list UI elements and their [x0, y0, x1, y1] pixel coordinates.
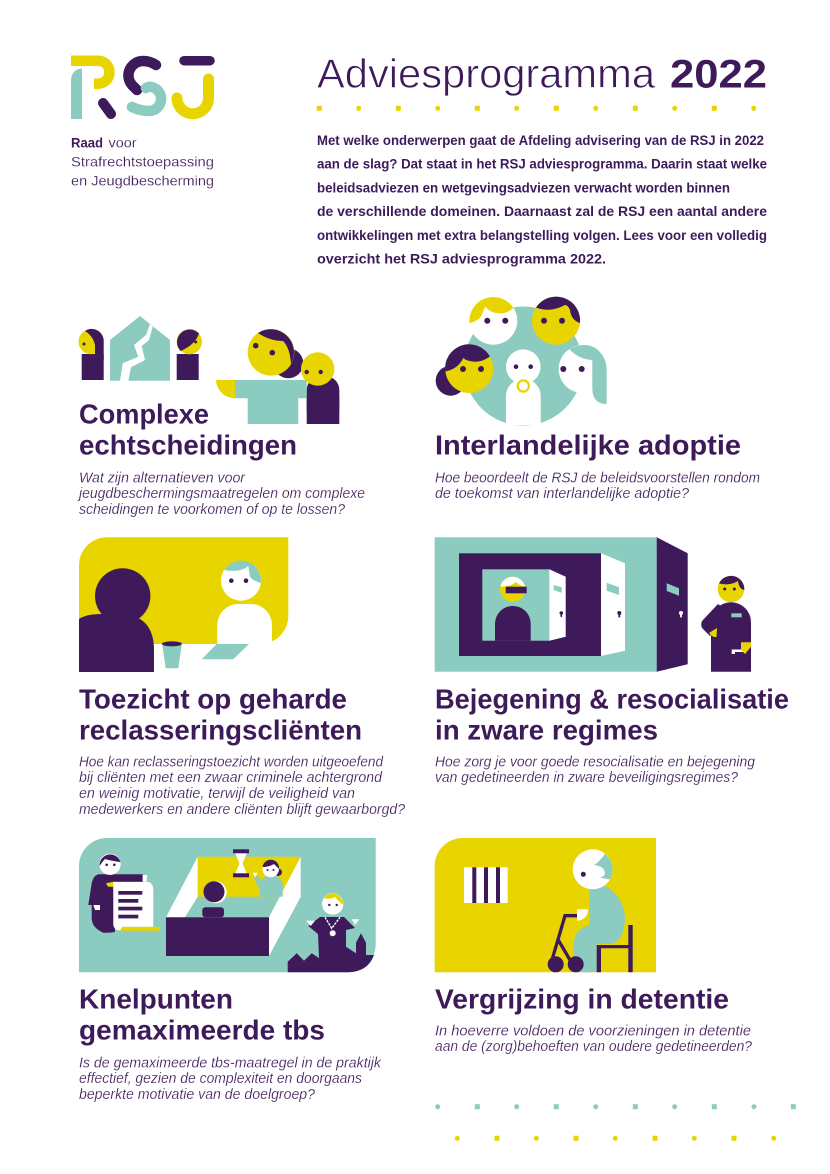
question text: scheidingen te voorkomen of op te lossen?: [79, 502, 346, 518]
heading: Complexe: [79, 398, 209, 430]
illustration: conversation at table: [79, 537, 288, 672]
illustration: elderly prisoner with walker: [435, 838, 656, 972]
question text: Hoe zorg je voor goede resocialisatie en bejegening: [435, 754, 755, 770]
heading: Toezicht op geharde: [79, 684, 347, 714]
heading: reclasseringscliënten: [79, 714, 362, 746]
question text: In hoeverre voldoen de voorzieningen in detentie: [435, 1023, 751, 1039]
question text: van gedetineerden in zware beveiligingsregimes?: [435, 770, 739, 786]
question text: medewerkers en andere cliënten blijft gewaarborgd?: [79, 802, 406, 818]
illustration: adoption faces: [436, 297, 607, 426]
logo: RSJ: [71, 61, 210, 119]
intro text: ontwikkelingen met extra belangstelling volgen. Lees voor een volledig: [317, 227, 767, 243]
question text: bij cliënten met een zwaar criminele achtergrond: [79, 770, 383, 786]
heading: gemaximeerde tbs: [79, 1014, 325, 1046]
question text: Wat zijn alternatieven voor: [79, 470, 246, 486]
question text: aan de (zorg)behoeften van oudere gedetineerden?: [435, 1039, 753, 1055]
question text: de toekomst van interlandelijke adoptie?: [435, 486, 690, 502]
logo text: Raad: [71, 134, 103, 150]
illustration: prison doors and guard: [435, 537, 751, 672]
intro text: overzicht het RSJ adviesprogramma 2022.: [317, 250, 606, 266]
heading: [79, 398, 297, 460]
title: Adviesprogramma: [317, 50, 655, 96]
dotted divider: footer teal: [435, 1104, 796, 1109]
logo text: Strafrechtstoepassing: [71, 154, 214, 170]
question text: Hoe beoordeelt de RSJ de beleidsvoorstellen rondom: [435, 470, 760, 486]
question text: Is de gemaximeerde tbs-maatregel in de praktijk: [79, 1055, 382, 1071]
question text: en weinig motivatie, terwijl de veiligheid van: [79, 786, 355, 802]
intro text: beleidsadviezen en wetgevingsadviezen verwacht worden binnen: [317, 179, 730, 195]
heading: [79, 984, 325, 1046]
heading: Bejegening & resocialisatie: [435, 684, 789, 714]
question text: [435, 754, 755, 786]
heading: echtscheidingen: [79, 430, 297, 460]
dotted divider: header: [317, 106, 756, 111]
panel: vergrijzing in detentie: [435, 838, 753, 1055]
logo text: [71, 134, 214, 189]
title: 2022: [670, 52, 767, 96]
question text: [77, 470, 365, 518]
intro text: [317, 132, 767, 266]
heading: Vergrijzing in detentie: [435, 984, 729, 1014]
logo text: en Jeugdbescherming: [71, 173, 214, 189]
logo text: voor: [108, 134, 137, 150]
illustration: court, hourglass and mayor: [79, 838, 376, 972]
heading: [79, 684, 362, 746]
question text: beperkte motivatie van de doelgroep?: [79, 1087, 316, 1103]
panel: interlandelijke adoptie: [435, 297, 760, 502]
question text: Hoe kan reclasseringstoezicht worden uitgeoefend: [79, 754, 384, 770]
heading: in zware regimes: [435, 714, 658, 746]
question text: jeugdbeschermingsmaatregelen om complexe: [77, 486, 365, 502]
intro text: aan de slag? Dat staat in het RSJ adviesprogramma. Daarin staat welke: [317, 156, 767, 172]
question text: [435, 1023, 753, 1055]
panel: knelpunten gemaximeerde tbs: [79, 838, 382, 1103]
dotted divider: footer yellow: [455, 1136, 776, 1141]
intro text: Met welke onderwerpen gaat de Afdeling advisering van de RSJ in 2022: [317, 132, 764, 148]
illustration: broken house and family: [78, 316, 339, 424]
question text: [435, 470, 760, 502]
intro text: de verschillende domeinen. Daarnaast zal de RSJ een aantal andere: [317, 203, 767, 219]
panel: bejegening en resocialisatie: [435, 537, 789, 786]
question text: effectief, gezien de complexiteit en doorgaans: [79, 1071, 362, 1087]
heading: [435, 684, 789, 746]
question text: [79, 754, 406, 818]
heading: Interlandelijke adoptie: [435, 430, 741, 460]
panel: toezicht op geharde reclasseringscliënten: [79, 537, 406, 818]
question text: [79, 1055, 382, 1103]
heading: Knelpunten: [79, 984, 233, 1014]
panel: complexe echtscheidingen: [77, 316, 365, 518]
